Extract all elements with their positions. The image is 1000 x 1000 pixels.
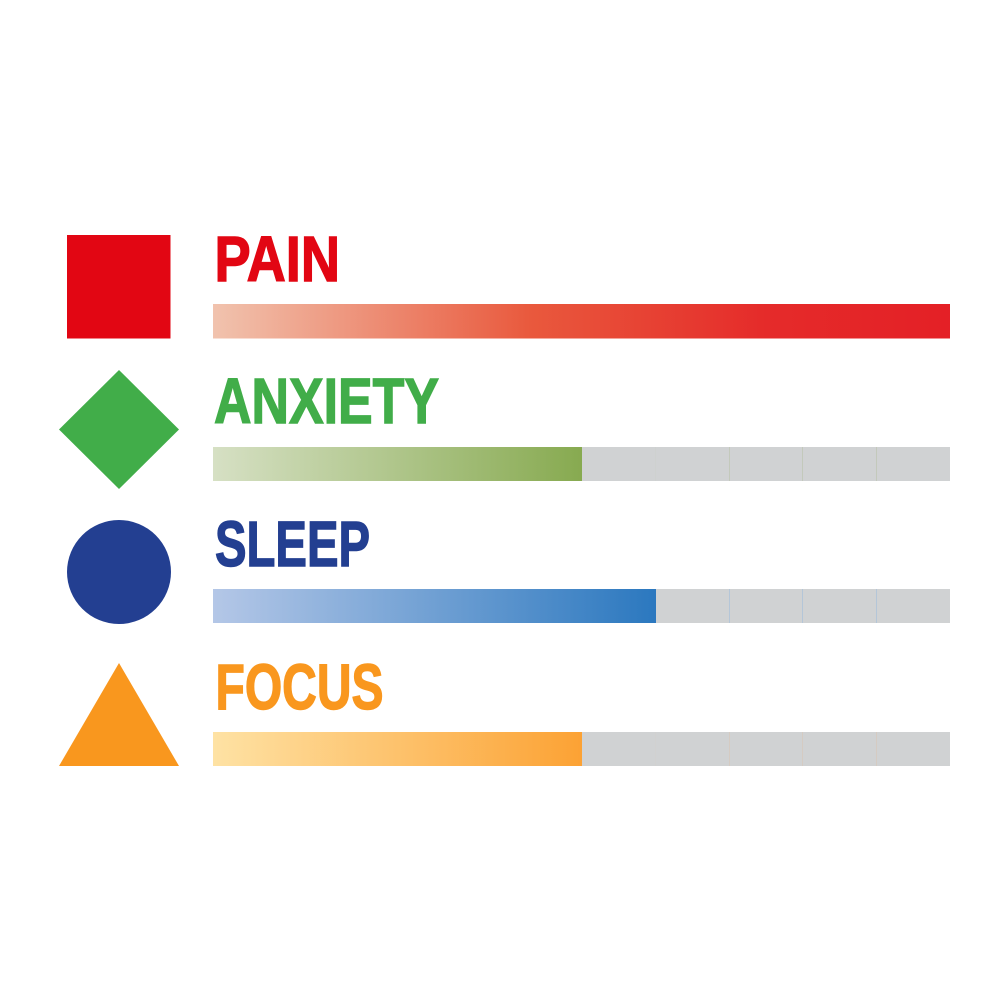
heading: ANXIETY: ANXIETY [214,365,439,437]
icon: orange triangle [59,663,179,766]
heading: SLEEP: SLEEP [215,508,370,580]
icon: blue circle [67,520,171,624]
heading: FOCUS: FOCUS [216,651,384,723]
bar: focus [213,732,950,766]
bar: anxiety [213,447,950,481]
bar: sleep [213,589,950,623]
heading: PAIN: PAIN [214,223,340,295]
icon: green diamond [59,370,179,489]
bar: pain [213,304,950,338]
icon: red square [67,235,170,338]
